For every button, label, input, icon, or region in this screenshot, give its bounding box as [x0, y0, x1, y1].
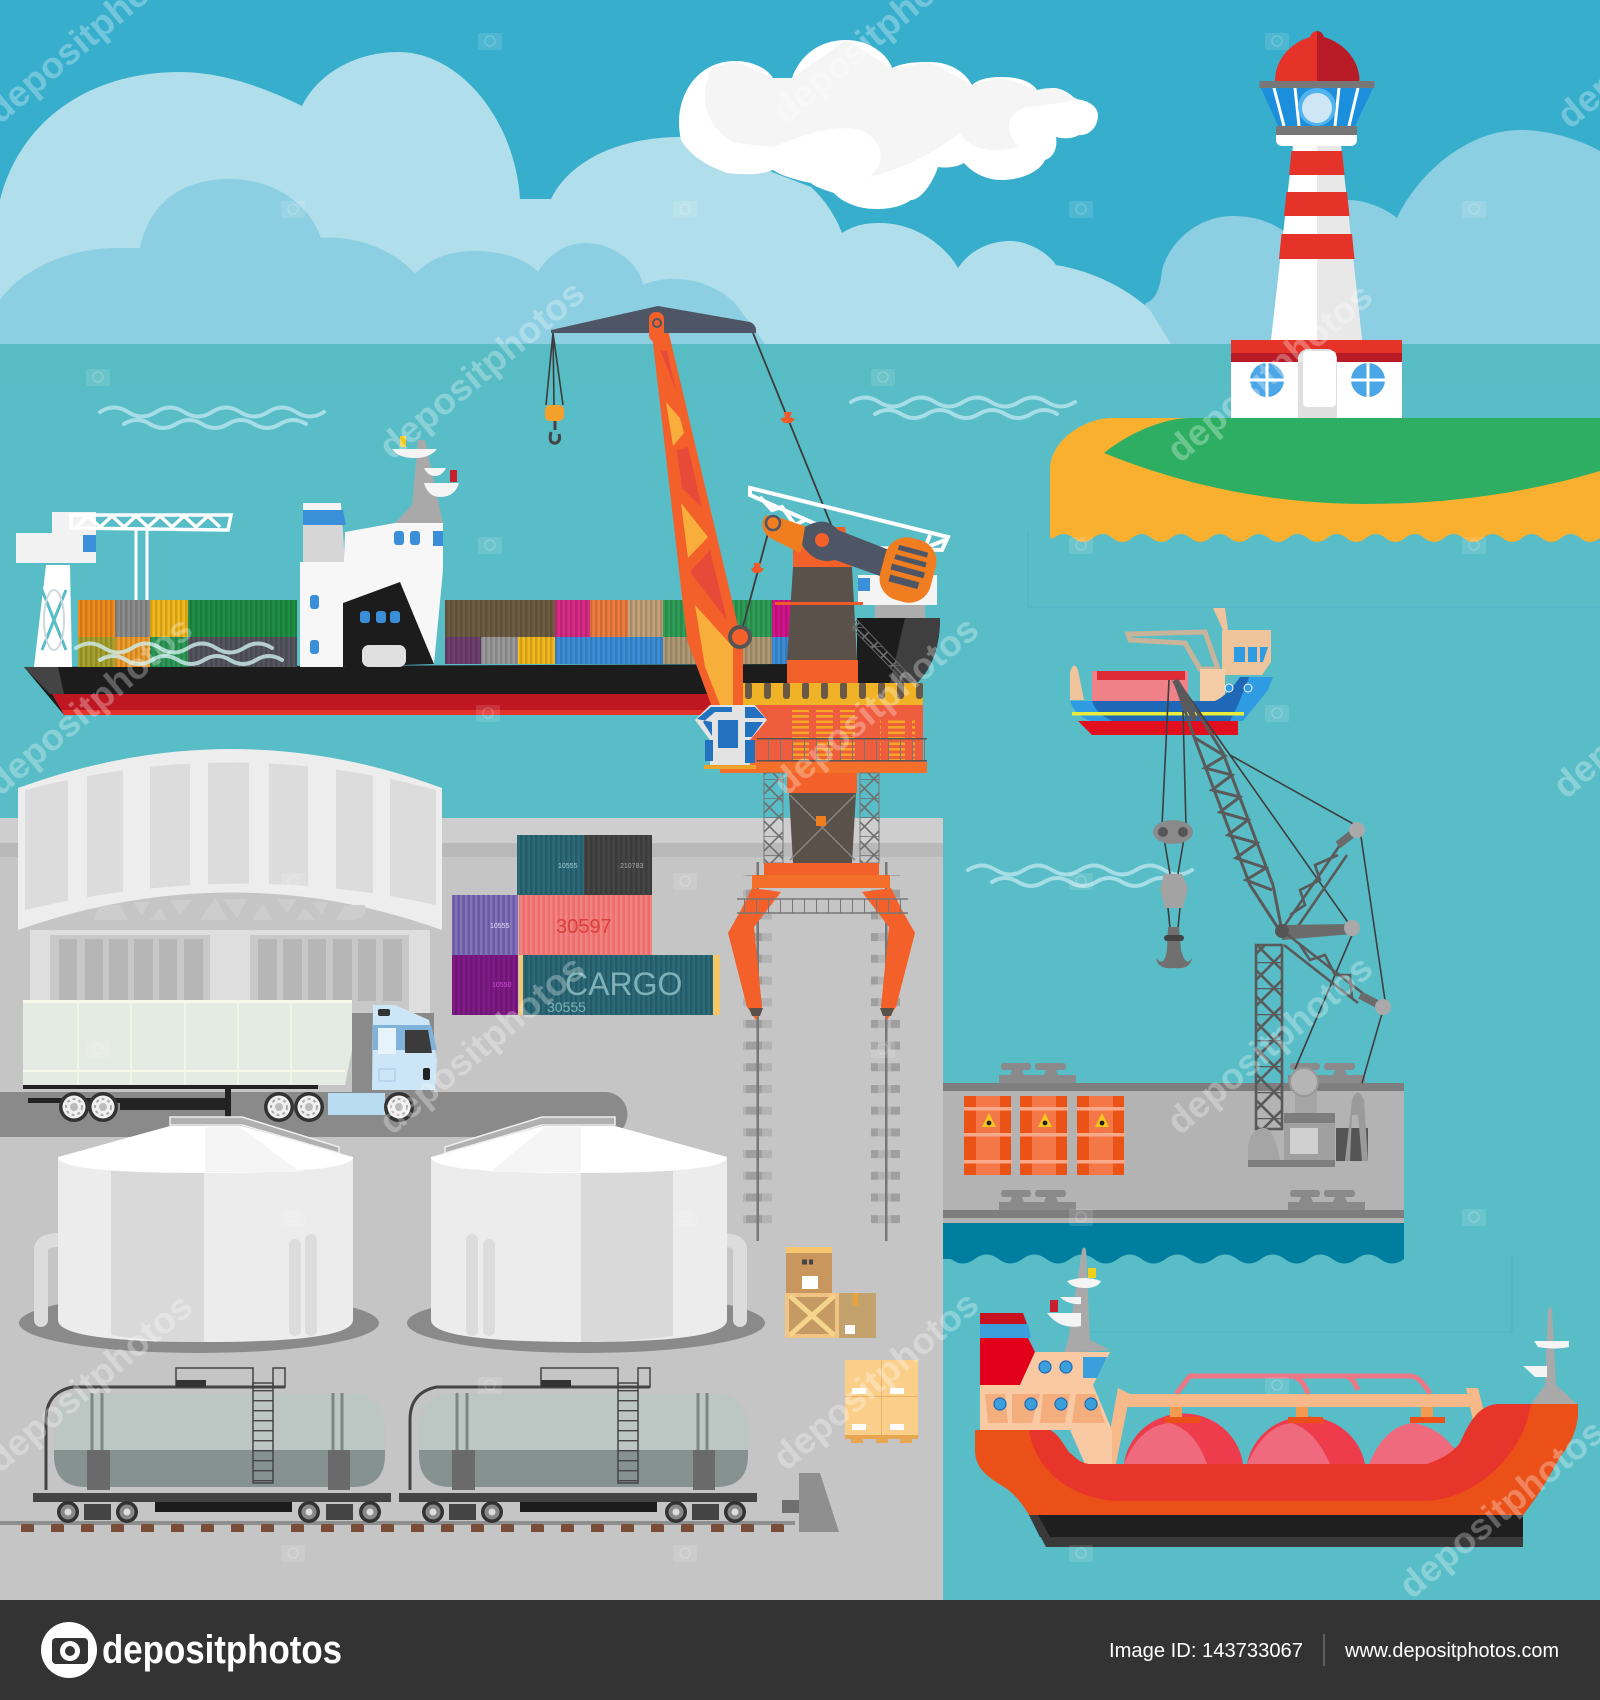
facade [30, 930, 430, 1015]
boom head beam [551, 306, 756, 342]
rail tank car 1 [33, 1368, 391, 1523]
arch and platform [46, 1387, 285, 1490]
dark container [584, 835, 652, 895]
tank [54, 1393, 385, 1487]
wheels [59, 1092, 414, 1122]
lower cable [742, 533, 768, 630]
waves over containers [76, 644, 282, 664]
rail tank car 2 [399, 1368, 757, 1523]
barrels [964, 1096, 1125, 1175]
horizon band [0, 344, 1600, 386]
cargo container [519, 955, 720, 1015]
vertical pipes [472, 1240, 489, 1330]
warehouse [18, 740, 442, 1015]
deck frame [1104, 1388, 1486, 1464]
rail line [0, 1521, 795, 1532]
background: sky [0, 0, 1600, 345]
grass [1104, 418, 1600, 504]
boom [650, 317, 750, 707]
hull [1070, 677, 1273, 735]
right cable [753, 333, 832, 527]
pipe loop [1176, 1376, 1430, 1394]
tower [1271, 146, 1362, 340]
bumper [782, 1473, 839, 1532]
right cloud [1120, 130, 1600, 344]
pipe [722, 1240, 740, 1320]
ladder [852, 620, 917, 690]
turret [775, 527, 863, 685]
rear truss jib [750, 488, 948, 550]
operator cab [695, 705, 767, 769]
watermark text: depositphotos [371, 272, 592, 467]
back arms [1275, 822, 1391, 1015]
box [839, 1293, 876, 1338]
trailer [23, 1000, 352, 1085]
lower bollards [999, 1190, 1365, 1210]
dome hatches [1165, 1417, 1445, 1423]
ship crane [16, 512, 231, 667]
LNG tanker [975, 1248, 1578, 1547]
waves [100, 398, 1192, 886]
mast [395, 440, 443, 523]
pallet stack [845, 1360, 918, 1443]
dome [1275, 31, 1360, 81]
carton [786, 1247, 832, 1293]
teal container: 10555 [558, 863, 578, 870]
sand [1050, 418, 1600, 542]
tank body [58, 1157, 353, 1342]
dark purple container: 10550 [492, 982, 512, 989]
watermark text: depositphotos [765, 608, 986, 803]
white cloud [679, 40, 1098, 209]
crane lattice legs [764, 773, 879, 863]
background: sea [0, 344, 1600, 1600]
counterweight arm [762, 516, 941, 608]
superstructure [980, 1352, 1112, 1464]
footer logo icon [41, 1622, 97, 1678]
pier water edge [943, 1223, 1404, 1264]
roof triangles [95, 898, 365, 920]
bow tan [1070, 665, 1084, 700]
tank straps [92, 1393, 342, 1490]
storage tank right [407, 1117, 765, 1353]
crane pillar [787, 773, 857, 863]
small cargo ship [1070, 608, 1273, 735]
hull [24, 664, 790, 715]
purple container [452, 895, 518, 955]
pier deck [943, 1083, 1404, 1223]
divider [1324, 1634, 1325, 1666]
website: www.depositphotos.com [1344, 1640, 1559, 1662]
fore deck bow [857, 618, 940, 683]
faint water outline [1090, 1257, 1512, 1332]
main jib [1175, 680, 1282, 931]
machine deck [720, 683, 927, 773]
dark purple container [452, 955, 518, 1015]
storage tank left [19, 1117, 379, 1353]
cargo container: CARGO [565, 966, 682, 1002]
purple container: 10555 [490, 923, 510, 930]
machinery base [1248, 1068, 1368, 1167]
roof railing [170, 1117, 339, 1153]
roof railing [445, 1117, 615, 1153]
footer logo wordmark: depositphotos [102, 1628, 342, 1672]
frame [33, 1493, 391, 1502]
keeper building [1231, 340, 1402, 418]
shipping container stack [452, 835, 720, 1015]
hull [975, 1404, 1578, 1547]
chassis [23, 1085, 318, 1119]
superstructure [300, 436, 459, 667]
containers fore stack [445, 600, 791, 664]
crane portal legs [728, 863, 915, 1020]
hook block [1153, 820, 1193, 968]
truck [23, 1000, 437, 1122]
quay top bands [0, 818, 943, 857]
teal container [517, 835, 584, 895]
salmon container [519, 895, 652, 955]
light cloud [0, 52, 1171, 344]
tower lattice [1256, 945, 1282, 1129]
rail tracks [743, 862, 900, 1241]
hook cables [546, 333, 563, 405]
big harbour crane [545, 306, 948, 863]
mid cloud [0, 179, 765, 344]
crane truss [1128, 632, 1218, 669]
watermark camera marks [86, 33, 1486, 1562]
arched roof [18, 749, 442, 930]
containers aft stack [78, 600, 297, 667]
stacked boxes [785, 1247, 918, 1443]
quay ground [0, 818, 943, 1600]
white cabin [858, 575, 937, 618]
lighthouse island [1050, 418, 1600, 542]
roof [431, 1126, 727, 1173]
quay pier [943, 1063, 1404, 1264]
crate [785, 1293, 839, 1338]
footer bar [0, 1600, 1600, 1700]
hook [545, 405, 564, 443]
cargo container: 30555 [547, 999, 586, 1015]
image id: Image ID: 143733067 [1109, 1640, 1303, 1662]
ladder [253, 1383, 273, 1483]
watermark text: depositphotos [1159, 947, 1380, 1142]
watermark text: depositphotos [765, 1283, 986, 1478]
fuel tank [328, 1093, 385, 1115]
container ship [16, 436, 940, 715]
doors [50, 935, 409, 1013]
clouds: far cloud bank [0, 52, 1600, 344]
pipe [41, 1240, 60, 1320]
cab [372, 1005, 437, 1090]
dark container: 210783 [620, 863, 643, 870]
watermark text: depositphotos [371, 947, 592, 1142]
vertical pipes [295, 1240, 311, 1330]
roof [58, 1126, 353, 1173]
spheres [1124, 1413, 1470, 1464]
wheels [57, 1501, 381, 1523]
lantern room [1261, 88, 1373, 126]
tank shadow [19, 1293, 379, 1353]
aft mast [1047, 1248, 1110, 1353]
bollards [999, 1063, 1365, 1083]
funnel [980, 1313, 1035, 1385]
lighthouse [1231, 31, 1402, 418]
watermark text: depositphotos [1159, 275, 1380, 470]
cabin [1213, 608, 1271, 675]
tank body [431, 1157, 727, 1342]
cables [1162, 680, 1386, 1083]
road [0, 1013, 628, 1137]
salmon container: 30597 [556, 916, 612, 938]
cargo [1092, 671, 1188, 701]
fore mast [1523, 1308, 1577, 1404]
grey dock crane [1153, 680, 1391, 1167]
faint outline below island [1028, 531, 1600, 607]
